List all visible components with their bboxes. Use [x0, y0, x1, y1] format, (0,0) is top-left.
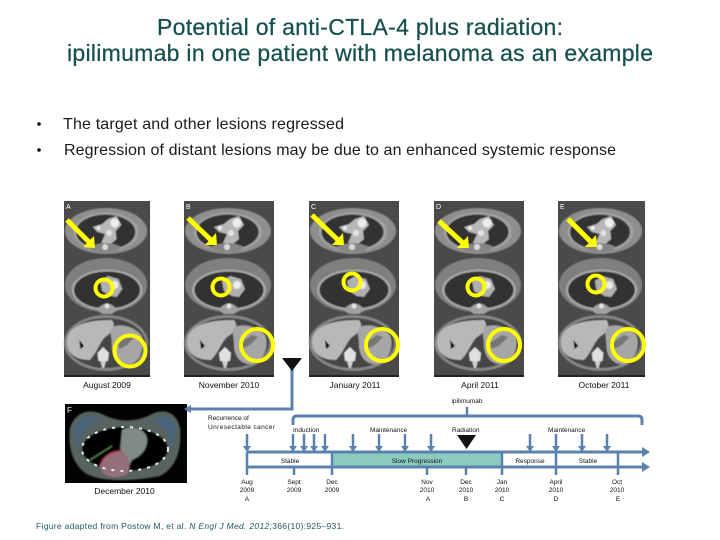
title	[67, 14, 653, 66]
panel D: CT scans April 2011: April 2011	[461, 380, 499, 390]
event labels: Maintenance	[548, 427, 586, 434]
time ticks	[247, 452, 618, 475]
panel D: CT scans April 2011: D	[436, 204, 441, 211]
date labels: April	[549, 479, 563, 486]
dose arrows	[247, 434, 607, 448]
event labels: Recurrence of	[208, 415, 249, 422]
panel B: CT scans November 2010	[184, 201, 274, 390]
panel E: CT scans October 2011: E	[560, 204, 565, 211]
bullet list: Regression of distant lesions may be due to an enhanced systemic response	[64, 142, 616, 159]
callout: ipilimumab start marker and arrow to panel F	[184, 358, 302, 413]
date labels: Oct	[612, 479, 622, 486]
panel B: CT scans November 2010: November 2010	[199, 380, 260, 390]
date labels: B	[464, 496, 468, 503]
date labels: D	[554, 496, 559, 503]
date labels: Aug	[241, 479, 253, 486]
title: Potential of anti-CTLA-4 plus radiation:	[157, 14, 563, 40]
timeline rails	[247, 447, 650, 472]
panel F: radiation planning CT December 2010: December 2010	[94, 486, 155, 496]
event labels: Maintenance	[370, 427, 408, 434]
date labels: 2010	[495, 487, 510, 494]
date labels: Nov	[421, 479, 434, 486]
event labels	[208, 415, 586, 434]
phase labels: Stable	[579, 458, 598, 465]
phase labels: Slow Progression	[392, 458, 443, 465]
phase: slow progression band	[332, 452, 502, 467]
panel D: CT scans April 2011	[434, 201, 524, 390]
date labels: Sept	[287, 479, 301, 486]
date labels: Dec	[460, 479, 473, 486]
date labels: Jan	[497, 479, 508, 486]
panel E: CT scans October 2011	[558, 201, 645, 390]
panel F: radiation planning CT December 2010: F	[67, 406, 72, 415]
panel F: radiation planning CT December 2010	[65, 404, 187, 496]
timeline chart	[240, 434, 650, 503]
title: ipilimumab in one patient with melanoma as an example	[67, 40, 653, 66]
date labels	[240, 479, 625, 503]
event labels: Radiation	[452, 427, 480, 434]
date labels: 2009	[287, 487, 302, 494]
phase labels	[281, 458, 598, 465]
panel A: CT scans August 2009: A	[66, 204, 71, 211]
source citation: Figure adapted from Postow M, et al. N Engl J Med. 2012;366(10):925–931.	[36, 521, 344, 531]
date labels: A	[426, 496, 431, 503]
ipilimumab span bracket: ipilimumab	[451, 398, 483, 405]
date labels: 2010	[549, 487, 564, 494]
dose arrowheads	[243, 446, 611, 452]
panel C: CT scans January 2011	[309, 201, 399, 390]
date labels: 2010	[610, 487, 625, 494]
date labels: 2009	[325, 487, 340, 494]
phase labels: Response	[515, 458, 545, 465]
bullet list	[37, 116, 616, 159]
ipilimumab span bracket	[293, 398, 642, 425]
panel B: CT scans November 2010: B	[186, 204, 191, 211]
date labels: E	[616, 496, 621, 503]
date labels: 2009	[240, 487, 255, 494]
date labels: A	[245, 496, 250, 503]
radiation marker	[457, 435, 476, 449]
phase labels: Stable	[281, 458, 300, 465]
panel A: CT scans August 2009: August 2009	[83, 380, 131, 390]
event labels: Unresectable cancer	[208, 424, 276, 431]
bullet list: The target and other lesions regressed	[63, 116, 344, 133]
date labels: Dec	[326, 479, 339, 486]
panel C: CT scans January 2011: January 2011	[330, 380, 381, 390]
date labels: 2010	[420, 487, 435, 494]
panel C: CT scans January 2011: C	[311, 204, 316, 211]
date labels: C	[500, 496, 505, 503]
date labels: 2010	[459, 487, 474, 494]
event labels: Induction	[293, 427, 320, 434]
panel A: CT scans August 2009	[64, 201, 150, 390]
panel E: CT scans October 2011: October 2011	[579, 380, 630, 390]
